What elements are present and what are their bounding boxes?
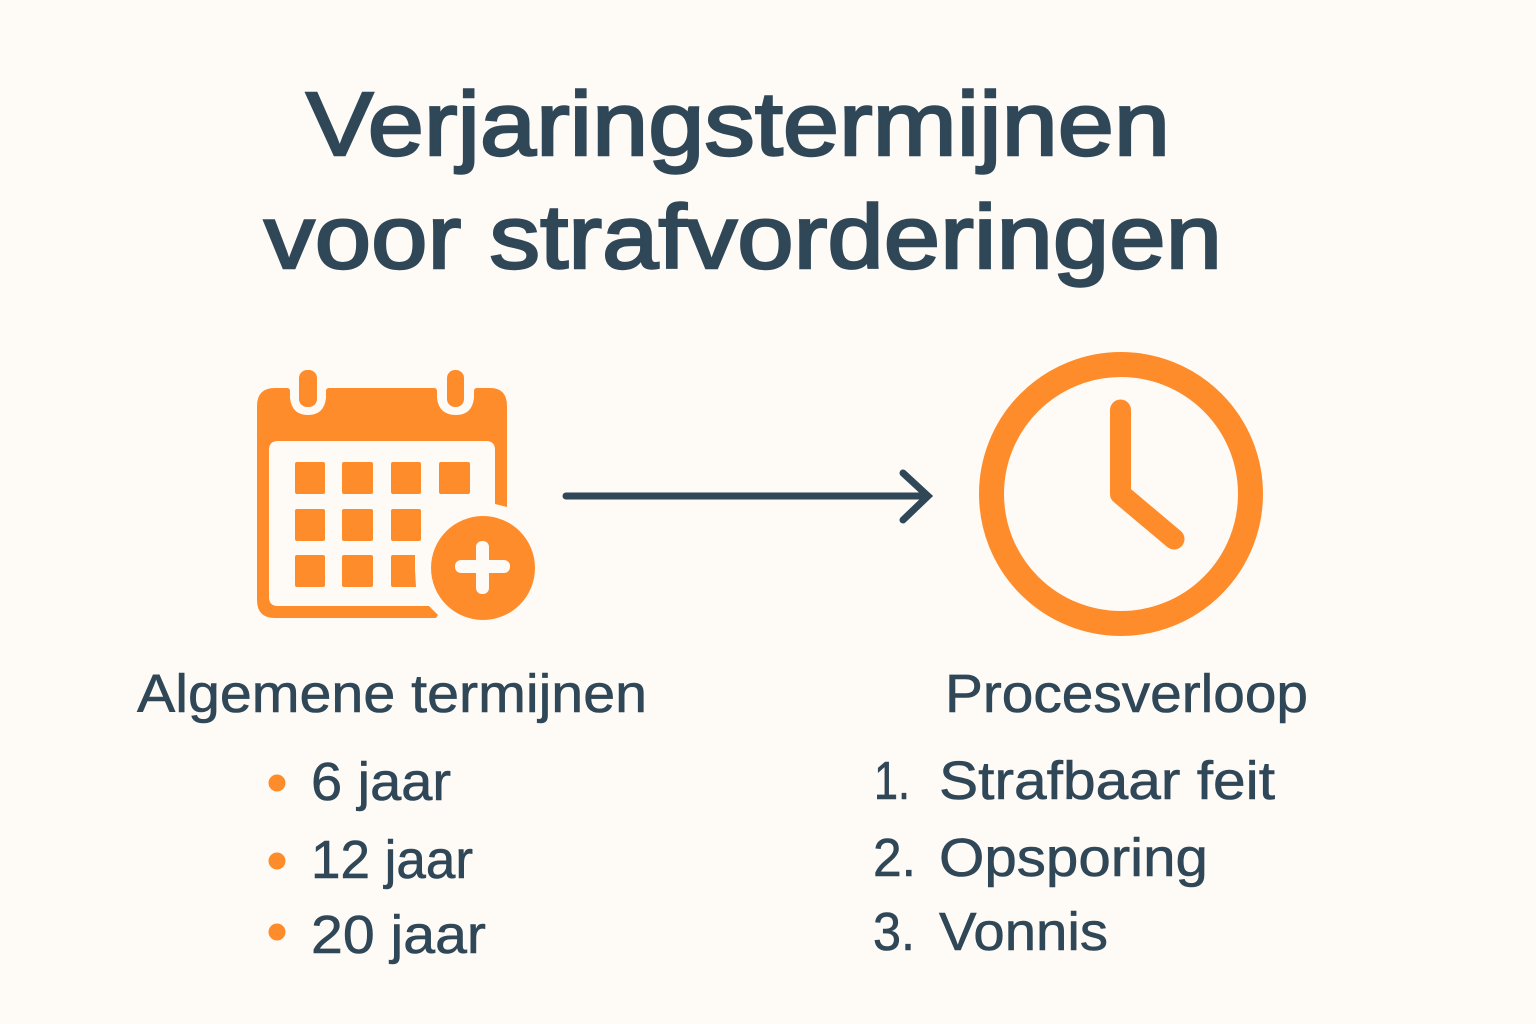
icon: clock — [992, 364, 1250, 624]
title: Verjaringstermijnen — [306, 75, 1170, 175]
heading: procesverloop: Procesverloop — [945, 664, 1308, 724]
title: voor strafvorderingen — [264, 188, 1222, 288]
list: process steps: 2. — [873, 828, 916, 888]
list: process steps: Vonnis — [939, 902, 1108, 962]
list: process steps: 1. — [874, 751, 910, 811]
list: process steps: 3. — [873, 902, 915, 962]
list: process steps: Opsporing — [939, 828, 1208, 888]
heading: algemene termijnen: Algemene termijnen — [137, 664, 647, 724]
list: general terms: 6 jaar — [311, 752, 451, 812]
arrow — [566, 473, 928, 520]
list: general terms — [268, 752, 486, 965]
list: process steps — [873, 751, 1275, 962]
icon: calendar with plus — [257, 370, 535, 620]
list: general terms: 12 jaar — [311, 830, 473, 890]
title — [264, 75, 1222, 288]
list: process steps: Strafbaar feit — [939, 751, 1275, 811]
list: general terms: 20 jaar — [311, 905, 486, 965]
